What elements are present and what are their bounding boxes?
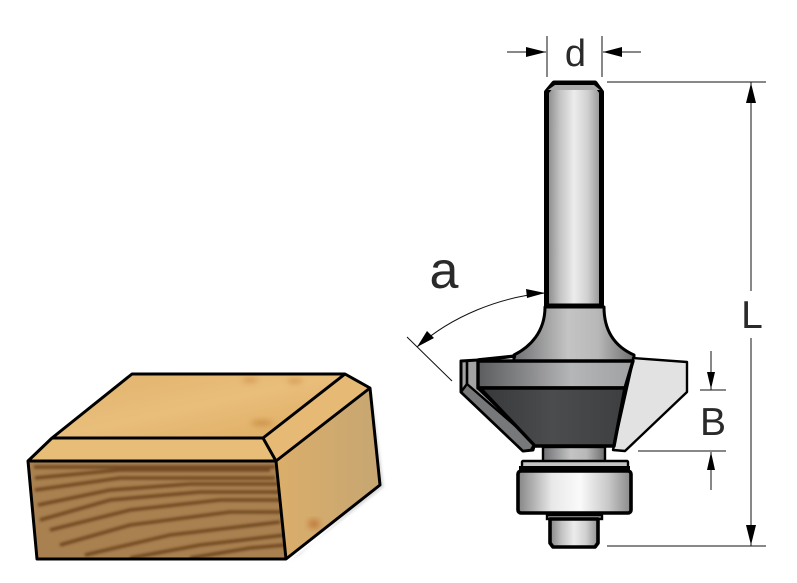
right side face — [276, 388, 380, 559]
wood block with chamfered edges — [25, 374, 384, 562]
L arrows — [746, 83, 756, 545]
dimension B — [638, 351, 726, 490]
d arrows — [526, 47, 622, 57]
left cutting wing — [461, 360, 535, 451]
label L: L — [741, 294, 763, 337]
label B: B — [700, 401, 726, 444]
block outlines — [28, 374, 380, 559]
bearing — [518, 471, 631, 513]
label d: d — [565, 33, 586, 75]
collar — [547, 515, 602, 519]
top face knots — [242, 378, 303, 426]
screw — [550, 519, 598, 547]
dimension d — [507, 33, 641, 77]
washer — [519, 461, 630, 472]
dimension L — [607, 82, 766, 546]
end grain face — [30, 462, 284, 558]
side chamfer — [263, 374, 370, 461]
wood top face — [52, 374, 345, 438]
neck curve — [514, 307, 634, 361]
shank — [546, 83, 602, 306]
upper body band — [478, 361, 633, 388]
spindle below body — [543, 447, 605, 462]
top edge line to neck — [478, 356, 516, 360]
angle arrows — [417, 289, 545, 347]
B arrows — [707, 372, 715, 470]
lower dark cone — [480, 388, 625, 446]
front chamfer — [28, 438, 276, 461]
label a: a — [430, 242, 459, 300]
router bit — [461, 83, 687, 547]
side face knot — [308, 519, 320, 529]
soft shadow at block right edge — [290, 392, 384, 561]
angle a — [407, 242, 545, 381]
right cutting wing — [613, 358, 687, 451]
